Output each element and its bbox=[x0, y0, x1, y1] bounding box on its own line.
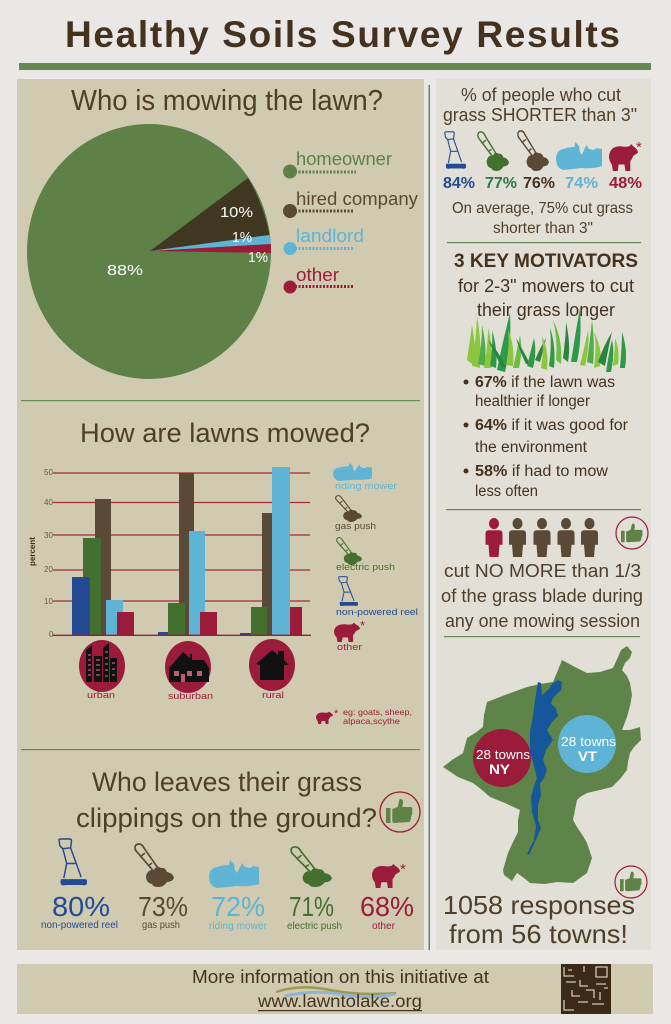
heading: who is mowing the lawn: Who is mowing the lawn? bbox=[71, 85, 383, 117]
stat: electric push 71%: electric push bbox=[287, 921, 342, 932]
legend: other bbox=[334, 618, 365, 653]
text: responses: from 56 towns! bbox=[449, 919, 628, 949]
heading: grass clippings: Who leaves their grass bbox=[92, 767, 362, 797]
legend item: other bbox=[284, 265, 354, 294]
callout: 28 towns VT bbox=[558, 715, 616, 773]
footnote: other examples: eg: goats, sheep, bbox=[343, 707, 412, 717]
stat: gas push 73%: gas push bbox=[142, 920, 180, 931]
stat: 74% riding bbox=[556, 142, 602, 192]
bar chart bbox=[28, 467, 311, 639]
footnote: other examples: * bbox=[334, 708, 339, 720]
chart legend bbox=[333, 463, 418, 653]
legend: non-powered reel: non-powered reel bbox=[336, 607, 418, 618]
callout: 28 towns VT: VT bbox=[578, 748, 597, 764]
stat: 48% other bbox=[609, 139, 642, 192]
callout: 28 towns NY: 28 towns bbox=[476, 748, 530, 762]
stat: non-powered reel 80% bbox=[41, 839, 118, 931]
heading: key motivators bbox=[454, 251, 638, 320]
section: key motivators bbox=[454, 251, 638, 500]
y axis labels: percent bbox=[28, 537, 37, 566]
pie chart: 10% bbox=[220, 204, 253, 221]
icon: suburban bbox=[165, 641, 213, 702]
stat: 48% other: 48% bbox=[609, 175, 642, 192]
pie legend bbox=[283, 149, 418, 294]
text: responses: 1058 responses bbox=[443, 890, 635, 920]
legend: riding mower bbox=[333, 463, 397, 492]
section: one third rule bbox=[441, 517, 648, 631]
icon: rural bbox=[249, 639, 295, 701]
section: who is mowing the lawn bbox=[27, 85, 418, 379]
text: average: shorter than 3" bbox=[493, 220, 593, 237]
section: grass clippings bbox=[41, 767, 420, 932]
bars: rural bbox=[240, 467, 302, 635]
list: motivators: 58% if had to mow bbox=[475, 463, 609, 480]
text: average: On average, 75% cut grass bbox=[452, 200, 633, 217]
text: one third rule: cut NO MORE than 1/3 bbox=[444, 561, 641, 581]
stat: other 68% bbox=[360, 861, 414, 932]
pie chart: 1% bbox=[248, 249, 268, 266]
callout: 28 towns NY bbox=[473, 729, 531, 787]
icon: rural: rural bbox=[262, 690, 284, 701]
legend: electric push bbox=[336, 538, 395, 573]
y axis labels: 30 bbox=[44, 531, 53, 540]
legend item: landlord bbox=[284, 226, 364, 255]
y axis labels: 10 bbox=[44, 597, 53, 606]
list: motivators: healthier if longer bbox=[475, 393, 590, 410]
heading: shorter than 3 inches bbox=[443, 85, 637, 125]
callout: 28 towns NY: NY bbox=[489, 761, 511, 777]
list: motivators: the environment bbox=[475, 439, 588, 456]
stat: electric push 71%: 71% bbox=[289, 891, 334, 922]
callout: 28 towns VT: 28 towns bbox=[561, 735, 616, 749]
stat: gas push 73% bbox=[135, 844, 188, 931]
section: map bbox=[443, 646, 647, 949]
heading: key motivators: their grass longer bbox=[477, 300, 615, 320]
list: motivators bbox=[464, 374, 628, 500]
QR code bbox=[561, 964, 611, 1014]
stat: 77% electric bbox=[478, 132, 517, 192]
stat: 77% electric: 77% bbox=[485, 175, 517, 192]
legend item: homeowner bbox=[283, 149, 392, 178]
y axis labels: 0 bbox=[49, 630, 54, 639]
stat: other 68%: * bbox=[400, 861, 406, 878]
legend item: hired company: hired company bbox=[296, 189, 418, 209]
section: percent who cut shorter than 3 inches bbox=[443, 85, 642, 237]
map: lake bbox=[527, 680, 562, 855]
text: one third rule: of the grass blade during bbox=[441, 586, 643, 606]
stat: non-powered reel 80%: 80% bbox=[52, 891, 110, 922]
footer text: More information on this initiative at bbox=[192, 967, 489, 987]
footer text bbox=[192, 967, 489, 1011]
pie chart bbox=[27, 124, 271, 379]
legend: riding mower: riding mower bbox=[335, 481, 397, 492]
list: motivators: less often bbox=[475, 483, 538, 500]
list: motivators: 64% if it was good for bbox=[475, 417, 628, 434]
y axis labels: 20 bbox=[44, 565, 53, 574]
y axis labels bbox=[28, 468, 54, 639]
heading: key motivators: 3 KEY MOTIVATORS bbox=[454, 251, 638, 272]
list: motivators: 67% if the lawn was bbox=[475, 374, 615, 391]
map: watershed bbox=[443, 646, 641, 884]
icon: suburban: suburban bbox=[168, 691, 213, 702]
icon: thumbs up bbox=[380, 792, 420, 832]
footer logo wave bbox=[276, 987, 396, 997]
text: average bbox=[452, 200, 633, 237]
legend item: other: other bbox=[296, 265, 339, 285]
heading: shorter than 3 inches: % of people who cut bbox=[461, 85, 621, 105]
stat: other 68%: other bbox=[372, 921, 396, 932]
footnote: other examples: alpaca,scythe bbox=[343, 716, 400, 726]
stat: riding mower 72%: 72% bbox=[211, 891, 265, 922]
section: how are lawns mowed bbox=[28, 418, 418, 726]
stat: 84% reel bbox=[443, 132, 475, 192]
legend: non-powered reel bbox=[336, 577, 418, 618]
icon: urban bbox=[79, 640, 125, 701]
stat: 74% riding: 74% bbox=[565, 175, 598, 192]
illustration: grass bbox=[467, 308, 626, 372]
bars: urban bbox=[72, 499, 134, 635]
stat: gas push 73%: 73% bbox=[138, 891, 188, 922]
stat: electric push 71% bbox=[287, 847, 342, 932]
stat: non-powered reel 80%: non-powered reel bbox=[41, 920, 118, 931]
legend: gas push bbox=[335, 496, 376, 532]
footer panel bbox=[17, 964, 653, 1014]
heading: how are lawns mowed: How are lawns mowed? bbox=[80, 418, 370, 448]
stat: riding mower 72% bbox=[209, 860, 268, 932]
left panel background bbox=[17, 79, 424, 950]
stat: 76% gas bbox=[518, 131, 555, 192]
stat: 76% gas: 76% bbox=[523, 175, 555, 192]
right panel background bbox=[436, 79, 651, 950]
bars: suburban bbox=[158, 473, 217, 635]
heading: grass clippings bbox=[76, 767, 377, 833]
heading: grass clippings: clippings on the ground? bbox=[76, 803, 377, 833]
legend item: hired company bbox=[283, 189, 418, 218]
legend: other: other bbox=[337, 642, 362, 653]
stat: riding mower 72%: riding mower bbox=[209, 921, 268, 932]
text: responses bbox=[443, 890, 635, 949]
title rule bbox=[19, 63, 651, 70]
stat: other 68%: 68% bbox=[360, 891, 414, 922]
legend: gas push: gas push bbox=[335, 521, 376, 532]
heading: shorter than 3 inches: grass SHORTER than 3" bbox=[443, 105, 637, 125]
pie chart: 88% bbox=[107, 262, 143, 279]
pie chart: 1% bbox=[232, 229, 252, 246]
y axis labels: 50 bbox=[44, 468, 53, 477]
icon: urban: urban bbox=[87, 690, 115, 701]
text: one third rule: any one mowing session bbox=[445, 611, 640, 631]
legend: electric push: electric push bbox=[336, 562, 395, 573]
legend item: homeowner: homeowner bbox=[296, 149, 392, 169]
stat: 84% reel: 84% bbox=[443, 175, 475, 192]
legend: other: * bbox=[360, 618, 365, 633]
icon row: people bbox=[486, 518, 598, 557]
stat: 48% other: * bbox=[636, 139, 642, 156]
footer text: www.lawntolake.org bbox=[257, 991, 422, 1011]
icon: thumbs up bbox=[615, 866, 647, 898]
heading: key motivators: for 2-3" mowers to cut bbox=[458, 276, 634, 296]
title: Healthy Soils Survey Results bbox=[65, 14, 620, 55]
text: one third rule bbox=[441, 561, 643, 631]
legend item: landlord: landlord bbox=[296, 226, 364, 246]
y axis labels: 40 bbox=[44, 498, 53, 507]
footnote: other examples bbox=[316, 707, 412, 726]
icon: thumbs up bbox=[616, 517, 648, 549]
